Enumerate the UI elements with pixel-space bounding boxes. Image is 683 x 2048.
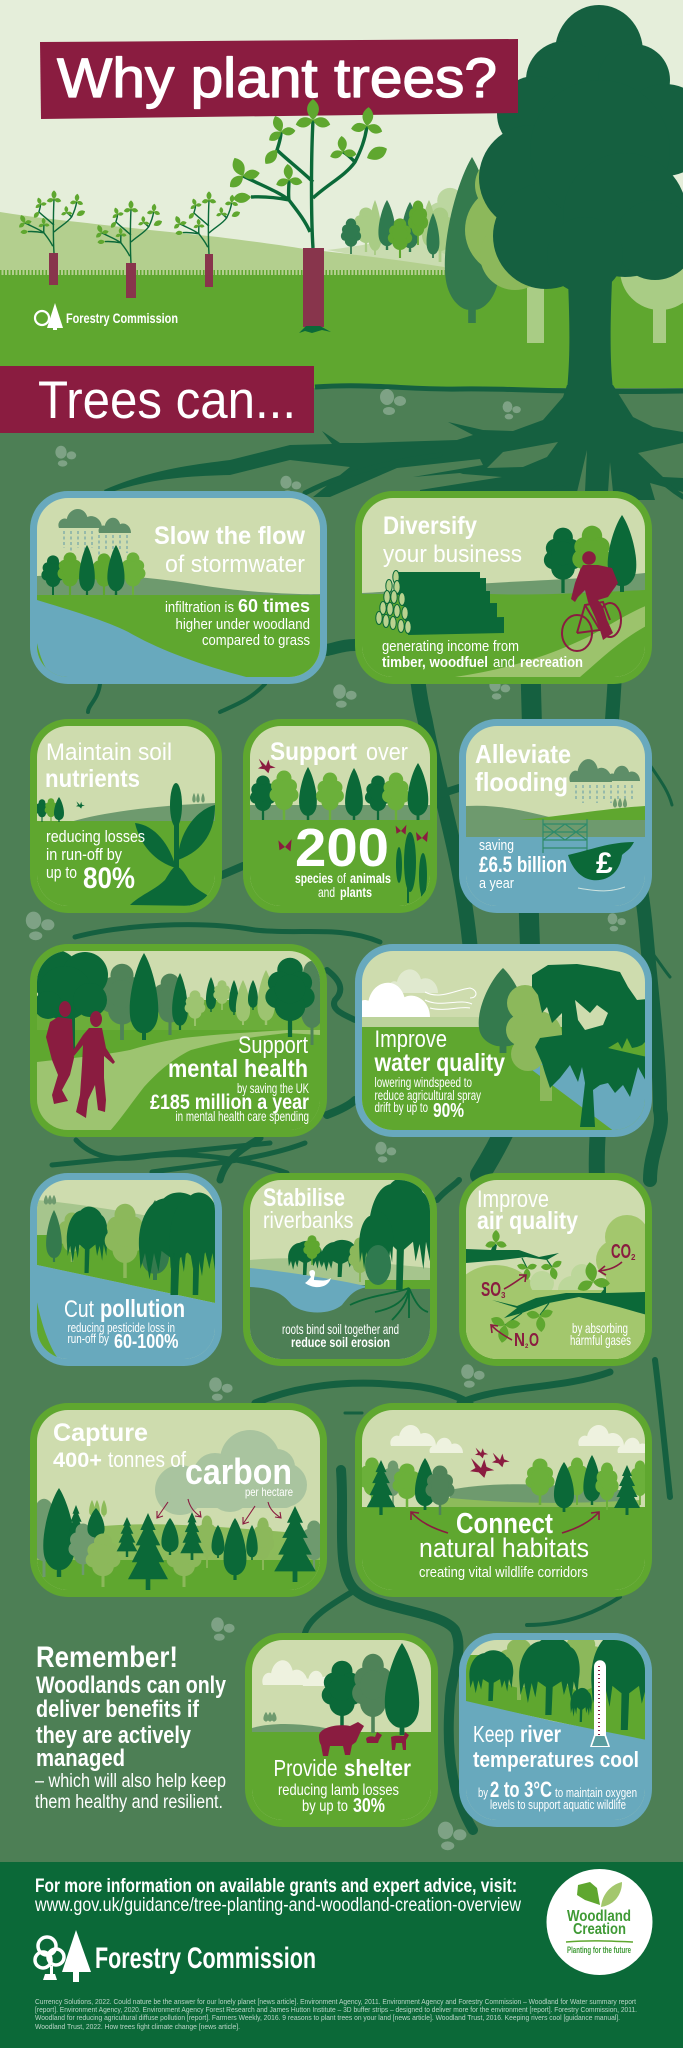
panel: alleviate flooding [459, 719, 652, 913]
text: connect natural habitats: natural habitats [419, 1533, 589, 1563]
text: connect natural habitats [419, 1508, 589, 1581]
title banner [40, 39, 518, 119]
saplings in tree guards [14, 99, 390, 333]
text: run-off stat: 80% [83, 862, 135, 895]
text: income sources: generating income from [382, 638, 519, 655]
text: references: Woodland for reducing agricultural diffuse pollution [report]. Farmers Weekly, 2016. 9 reasons to plant trees on your land [news article]. Woodland Trust, 2016. Keeping rivers cool [guidance manual]. [35, 2013, 620, 2022]
text: stabilise riverbanks: reduce soil erosion [291, 1334, 390, 1350]
text: support 200 species: of [337, 870, 346, 886]
icon: tree roots [350, 1288, 428, 1320]
text: maintain soil nutrients heading [45, 739, 172, 793]
header logo: Forestry Commission [35, 303, 178, 330]
text: air quality: by absorbing [572, 1320, 628, 1336]
footer [0, 1862, 683, 2048]
text: water quality [374, 1026, 505, 1122]
text: diversify heading: your business [383, 541, 522, 568]
text: stabilise riverbanks: Stabilise [263, 1184, 345, 1212]
text: alleviate flooding: a year [479, 875, 514, 892]
text: support 200 species: Support [270, 738, 358, 766]
text: income sources: recreation [520, 654, 583, 671]
text: more information: www.gov.uk/guidance/tree-planting-and-woodland-creation-overview [34, 1895, 521, 1916]
panel: diversify your business [355, 491, 652, 684]
text: water quality: Improve [374, 1026, 447, 1053]
text: maintain soil nutrients heading: nutrients [45, 765, 140, 793]
text: alleviate flooding: Alleviate [475, 739, 571, 769]
text: diversify heading [383, 512, 522, 568]
panel: maintain soil nutrients [30, 719, 222, 913]
icon: wind lines [425, 988, 476, 1009]
text: river temperatures: levels to support aquatic wildlife [490, 1797, 626, 1812]
text: provide shelter: by up to [302, 1798, 348, 1815]
text: river temperatures: 2 to 3°C [490, 1777, 552, 1802]
panel: improve air quality: SO [481, 1279, 501, 1301]
text: support 200 species: species [295, 870, 333, 886]
text: air quality: air quality [477, 1207, 578, 1235]
text: alleviate flooding: £6.5 billion [479, 852, 567, 877]
background trees [445, 155, 683, 343]
panel: improve air quality: 3 [501, 1291, 506, 1300]
text block: remember: – which will also help keep [35, 1771, 226, 1792]
text: support 200 species: plants [340, 884, 372, 900]
text: income sources: and [493, 654, 515, 671]
text: water quality: drift by up to [374, 1100, 428, 1115]
text: capture carbon: tonnes of [108, 1447, 187, 1472]
text: support 200 species: animals [350, 870, 391, 886]
text: river temperatures: to maintain oxygen [555, 1785, 637, 1800]
banner: Trees can: Trees can... [38, 371, 296, 430]
panel: cut pollution [30, 1173, 223, 1366]
text block: remember [35, 1641, 227, 1813]
big tree [479, 5, 683, 390]
text: stabilise riverbanks [263, 1184, 399, 1350]
text: cut pollution: pollution [100, 1295, 185, 1323]
text: more information [34, 1876, 521, 1916]
title banner: Why plant trees? [57, 46, 497, 109]
soil [0, 388, 683, 1862]
panel: improve air quality: 2 [525, 1344, 529, 1350]
text: infiltration stat: compared to grass [202, 632, 310, 649]
text: run-off stat: reducing losses [46, 827, 145, 846]
text block: remember: Woodlands can only [36, 1672, 227, 1699]
text: infiltration stat: higher under woodland [176, 616, 310, 633]
text: river temperatures: Keep [473, 1721, 514, 1747]
text: cut pollution: reducing pesticide loss in [68, 1320, 175, 1335]
icon: stacked logs [376, 570, 504, 635]
text: provide shelter [274, 1755, 411, 1817]
logo: Woodland Creation: Planting for the future [567, 1945, 631, 1955]
text: capture carbon: Capture [53, 1419, 148, 1447]
text block: remember: deliver benefits if [36, 1696, 200, 1723]
panel: improve air quality: N [514, 1330, 525, 1350]
icon: couple walking [46, 1001, 115, 1118]
panel: connect natural habitats [355, 1403, 652, 1597]
text: connect natural habitats: Connect [456, 1508, 553, 1540]
icon: willow tree [532, 964, 647, 1127]
text: alleviate flooding: saving [479, 837, 514, 854]
text: cut pollution: 60-100% [114, 1331, 179, 1353]
text: air quality: Improve [477, 1186, 549, 1213]
text block: remember: they are actively [36, 1722, 192, 1749]
text: run-off stat [46, 827, 145, 895]
text: mental health: Support [238, 1032, 308, 1059]
text: maintain soil nutrients heading: Maintain soil [46, 739, 172, 766]
text: income sources [382, 638, 583, 671]
icon: connecting arrows [411, 1512, 599, 1533]
panel: stabilise riverbanks [243, 1173, 437, 1366]
text: support 200 species: 200 [295, 818, 389, 878]
logo: Forestry Commission [35, 1930, 316, 1982]
soil pebbles [26, 389, 626, 1850]
text: infiltration stat: infiltration is [165, 599, 234, 616]
panel: improve air quality: CO [611, 1241, 631, 1263]
text: capture carbon: carbon [185, 1451, 292, 1492]
icon: sheep and lambs [319, 1722, 409, 1756]
text: slow the flow heading: Slow the flow [154, 522, 306, 550]
icon: gate [543, 819, 587, 853]
text: run-off stat: in run-off by [46, 845, 122, 864]
icon: carbon cloud [155, 1430, 307, 1515]
text: water quality: reduce agricultural spray [374, 1088, 481, 1103]
text: capture carbon: per hectare [245, 1485, 293, 1499]
text: mental health [150, 1032, 309, 1124]
text: support 200 species: and [318, 884, 335, 900]
logo: Woodland Creation [546, 1869, 652, 1975]
text: support 200 species [270, 738, 408, 900]
text: air quality [477, 1186, 631, 1348]
roots [52, 385, 683, 1830]
text: capture carbon: 400+ [53, 1449, 102, 1472]
text: mental health: by saving the UK [237, 1080, 309, 1096]
icon: thermometer [590, 1660, 610, 1747]
icon: swan [305, 1270, 331, 1287]
icon: cyclist [562, 551, 621, 651]
panel: capture carbon [27, 1403, 327, 1597]
text: cut pollution: Cut [64, 1296, 94, 1323]
icon: foxgloves [396, 832, 427, 903]
text: income sources: timber, woodfuel [382, 654, 488, 671]
logo: Forestry Commission: Forestry Commission [95, 1942, 316, 1975]
text: river temperatures: by [478, 1785, 488, 1800]
text: diversify heading: Diversify [383, 512, 477, 540]
text: provide shelter: reducing lamb losses [278, 1782, 399, 1799]
text: provide shelter: Provide [274, 1755, 338, 1781]
text: slow the flow heading: of stormwater [165, 551, 305, 578]
text: mental health: mental health [168, 1055, 308, 1083]
text: infiltration stat [165, 596, 310, 649]
text: water quality: water quality [374, 1049, 505, 1077]
text: provide shelter: shelter [344, 1755, 411, 1781]
text block: remember: them healthy and resilient. [35, 1792, 223, 1813]
text: capture carbon [53, 1419, 293, 1499]
text block: remember: managed [36, 1745, 125, 1772]
panel: keep river temperatures cool [459, 1628, 660, 1827]
text: water quality: lowering windspeed to [374, 1075, 472, 1090]
icon: pound leaf: £ [596, 847, 613, 880]
panel: support 200 species [243, 719, 437, 913]
distant tree cluster [341, 188, 475, 272]
text: mental health: £185 million a year [150, 1091, 309, 1114]
text: references [35, 1997, 637, 2031]
panel: slow the flow of stormwater [30, 491, 327, 684]
icon: pollutant arrows [491, 1262, 622, 1340]
text: slow the flow heading [154, 522, 306, 578]
panel: improve air quality [450, 1173, 652, 1366]
text: more information: For more information on available grants and expert advice, visit: [35, 1876, 517, 1897]
text: air quality: harmful gases [570, 1332, 631, 1348]
text: mental health: in mental health care spending [176, 1108, 309, 1124]
icon: branches with leaves [466, 1243, 647, 1325]
text: provide shelter: 30% [353, 1795, 385, 1817]
icon: birds [470, 1448, 510, 1478]
icon: seedling on soil mound [130, 783, 215, 906]
text: cut pollution [64, 1295, 185, 1353]
text: alleviate flooding [475, 739, 571, 892]
text: cut pollution: run-off by [68, 1331, 109, 1346]
panel: support mental health [30, 944, 329, 1137]
icon: pound leaf [568, 842, 634, 891]
text: stabilise riverbanks: riverbanks [263, 1207, 354, 1233]
text: support 200 species: over [366, 739, 408, 766]
panel: provide shelter [245, 1633, 438, 1827]
background sky and hills [0, 0, 683, 400]
text: water quality: 90% [433, 1100, 464, 1122]
text: river temperatures [473, 1721, 639, 1812]
panel: improve air quality: O [529, 1330, 539, 1350]
text: stabilise riverbanks: roots bind soil together and [282, 1321, 399, 1337]
icons: birds and butterflies [258, 759, 428, 851]
panel: improve water quality [354, 944, 652, 1137]
text: alleviate flooding: flooding [475, 767, 568, 797]
text: connect natural habitats: creating vital wildlife corridors [419, 1564, 588, 1581]
text: references: Woodland Trust, 2022. How trees fight climate change [news article]. [35, 2022, 240, 2031]
text: run-off stat: up to [46, 863, 77, 882]
header logo: Forestry Commission: Forestry Commission [66, 310, 178, 326]
text: river temperatures: temperatures cool [473, 1747, 639, 1772]
text block: remember: Remember! [36, 1641, 178, 1674]
text: river temperatures: river [520, 1721, 561, 1747]
panel: improve air quality: 2 [631, 1253, 636, 1262]
text: infiltration stat: 60 times [238, 596, 310, 616]
logo: Woodland Creation: Creation [573, 1921, 626, 1938]
logo: Woodland Creation: Woodland [567, 1908, 631, 1925]
